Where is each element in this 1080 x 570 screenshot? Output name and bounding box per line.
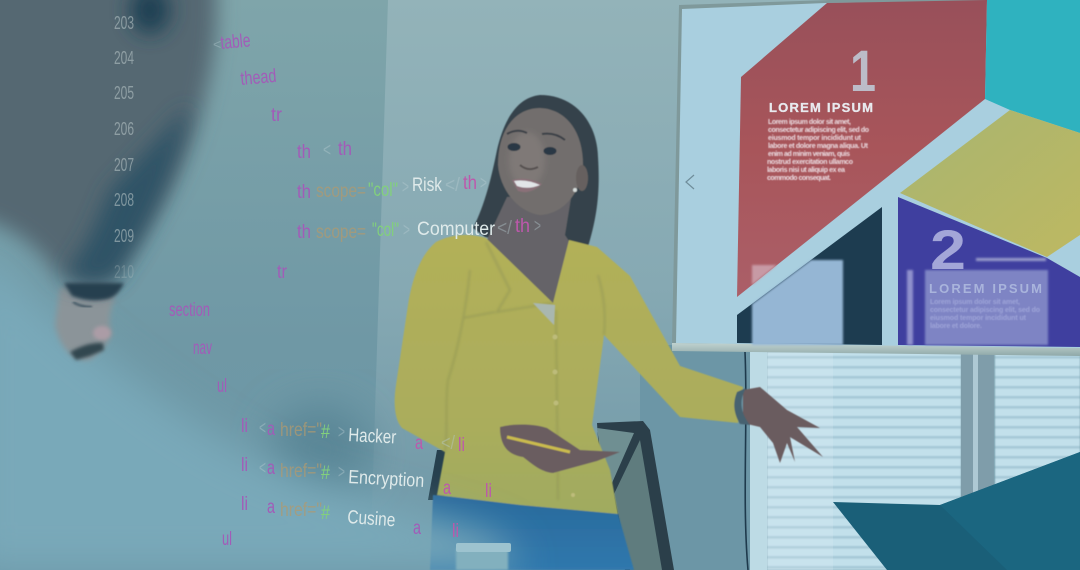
line numbers: 205: [114, 83, 134, 103]
teal panel: [985, 0, 1080, 133]
blurred foreground head: [0, 0, 217, 285]
pencil: [507, 437, 570, 452]
yellow panel: [900, 110, 1080, 257]
heading one: LOREM IPSUM: [769, 100, 873, 115]
code overlay: navigation markup: href=": [280, 461, 322, 482]
code overlay: navigation markup: a: [267, 497, 275, 518]
dark panel: [737, 207, 882, 345]
panel one body text: [767, 119, 869, 182]
code overlay: table markup: Risk: [412, 175, 442, 196]
code overlay: table markup: >: [402, 177, 409, 198]
cardigan shading: [445, 242, 605, 500]
near hand: [500, 424, 620, 473]
code overlay: navigation markup: li: [452, 521, 459, 542]
code overlay: navigation markup: li: [458, 435, 465, 456]
panel one body text: commodo consequat.: [767, 175, 831, 182]
code overlay: navigation markup: section: [169, 300, 210, 321]
watch: [734, 388, 750, 425]
window reflections: [752, 258, 1048, 345]
code overlay: navigation markup: li: [241, 455, 248, 476]
presenter: [395, 95, 823, 570]
man's brow: [64, 283, 124, 300]
cardigan buttons: [552, 334, 575, 497]
man's eye: [73, 302, 92, 307]
panel one body text: consectetur adipiscing elit, sed do: [768, 127, 869, 134]
code overlay: navigation markup: ul: [222, 529, 232, 550]
code overlay: table markup: th: [515, 216, 530, 237]
man's moustache: [70, 343, 104, 360]
dark folder: [833, 452, 1080, 570]
cardigan body and arm: [395, 235, 743, 514]
jeans: [430, 495, 634, 570]
red panel: [737, 0, 987, 297]
inner top: [533, 303, 555, 325]
code overlay: table markup: >: [480, 173, 487, 194]
previous arrow: [686, 175, 694, 189]
screen bottom bar: [672, 343, 1080, 356]
line numbers: [114, 13, 134, 282]
eyes: [508, 143, 556, 155]
line numbers: 209: [114, 226, 134, 246]
code overlay: navigation markup: Hacker: [348, 425, 397, 449]
purple panel: [898, 197, 1080, 347]
wall shadow: [270, 405, 370, 495]
code overlay: table markup: scope=: [316, 181, 366, 202]
code overlay: table markup: tr: [271, 105, 283, 126]
panel two body text: consectetur adipiscing elit, sed do: [930, 307, 1040, 314]
nose shadow: [520, 165, 538, 169]
panel one body text: eiusmod tempor incididunt ut: [768, 135, 862, 142]
number 2: 2: [930, 218, 966, 281]
pointing hand: [743, 387, 823, 463]
panel two body text: labore et dolore.: [930, 323, 982, 330]
code overlay: navigation markup: </: [441, 433, 456, 454]
code overlay: table markup: th: [297, 182, 311, 203]
man's face: [55, 282, 118, 360]
code overlay: table markup: <: [213, 36, 221, 52]
code overlay: navigation markup: >: [338, 422, 345, 443]
panel two body text: Lorem ipsum dolor sit amet,: [930, 299, 1020, 306]
line numbers: 210: [114, 262, 134, 282]
code overlay: table markup: [213, 30, 541, 283]
code overlay: navigation markup: a: [267, 458, 275, 479]
code overlay: table markup: th: [463, 173, 477, 194]
ear and earring: [573, 165, 588, 192]
window with blinds: [745, 352, 1080, 570]
line numbers: 208: [114, 190, 134, 210]
screen frame: [672, 0, 1080, 348]
code overlay: navigation markup: a: [443, 478, 451, 499]
code overlay: navigation markup: a: [413, 518, 421, 539]
code overlay: table markup: th: [297, 142, 311, 163]
code overlay: navigation markup: li: [241, 416, 248, 437]
code overlay: navigation markup: href=": [280, 500, 322, 521]
code overlay: navigation markup: >: [338, 462, 345, 483]
code overlay: table markup: </: [445, 175, 461, 196]
code overlay: table markup: scope=: [316, 222, 366, 243]
code overlay: navigation markup: a: [267, 419, 275, 440]
line numbers: 203: [114, 13, 134, 33]
number 1: 1: [850, 39, 876, 104]
blurred foreground shoulder: [0, 240, 520, 570]
code overlay: table markup: th: [297, 222, 311, 243]
code overlay: navigation markup: nav: [193, 338, 212, 359]
code overlay: table markup: th: [338, 139, 352, 160]
line numbers: 204: [114, 48, 134, 68]
paper cup: [456, 543, 511, 570]
code overlay: navigation markup: #: [321, 463, 330, 484]
face: [498, 108, 583, 215]
code overlay: navigation markup: Encryption: [348, 467, 425, 492]
code overlay: table markup: thead: [240, 66, 277, 90]
code overlay: table markup: "col": [368, 180, 398, 201]
head shadow: [66, 0, 190, 283]
wall-mounted presentation screen: [672, 0, 1080, 356]
panel one body text: nostrud exercitation ullamco: [767, 159, 853, 166]
man's nose: [93, 326, 111, 340]
code overlay: navigation markup: li: [241, 494, 248, 515]
code overlay: table markup: >: [534, 216, 541, 237]
code overlay: navigation markup: <: [259, 418, 266, 439]
seated man in background: [55, 282, 118, 360]
code overlay: table markup: <: [323, 140, 331, 161]
panel two body text: eiusmod tempor incididunt ut: [930, 315, 1027, 322]
line numbers: 206: [114, 119, 134, 139]
code overlay: table markup: >: [403, 220, 410, 241]
code overlay: table markup: "col": [372, 220, 399, 241]
code overlay: navigation markup: [169, 300, 492, 550]
code overlay: navigation markup: a: [415, 433, 423, 454]
face highlight: [509, 132, 545, 188]
panel one body text: enim ad minim veniam, quis: [768, 151, 850, 158]
code overlay: navigation markup: ul: [217, 376, 227, 397]
panel two body text: [930, 299, 1040, 330]
code overlay: navigation markup: Cusine: [347, 507, 396, 531]
code overlay: navigation markup: <: [259, 458, 266, 479]
office chair: [428, 421, 674, 570]
code overlay: navigation markup: li: [485, 481, 492, 502]
code overlay: table markup: tr: [277, 262, 288, 283]
code overlay: table markup: </: [497, 218, 513, 239]
code overlay: navigation markup: href=": [280, 420, 322, 441]
panel one body text: labore et dolore magna aliqua. Ut: [768, 143, 869, 150]
mouth: [512, 179, 542, 192]
neck and chest: [486, 192, 572, 305]
code overlay: navigation markup: #: [321, 503, 330, 524]
code overlay: navigation markup: #: [321, 422, 330, 443]
panel one body text: laboris nisi ut aliquip ex ea: [767, 167, 845, 174]
heading two: LOREM IPSUM: [929, 281, 1042, 296]
code overlay: table markup: table: [220, 30, 251, 54]
eyebrows: [507, 131, 565, 140]
line numbers: 207: [114, 155, 134, 175]
panel one body text: Lorem ipsum dolor sit amet,: [768, 119, 851, 126]
hair: [473, 95, 599, 250]
code overlay: table markup: Computer: [417, 219, 496, 240]
screen background: [676, 0, 1080, 348]
